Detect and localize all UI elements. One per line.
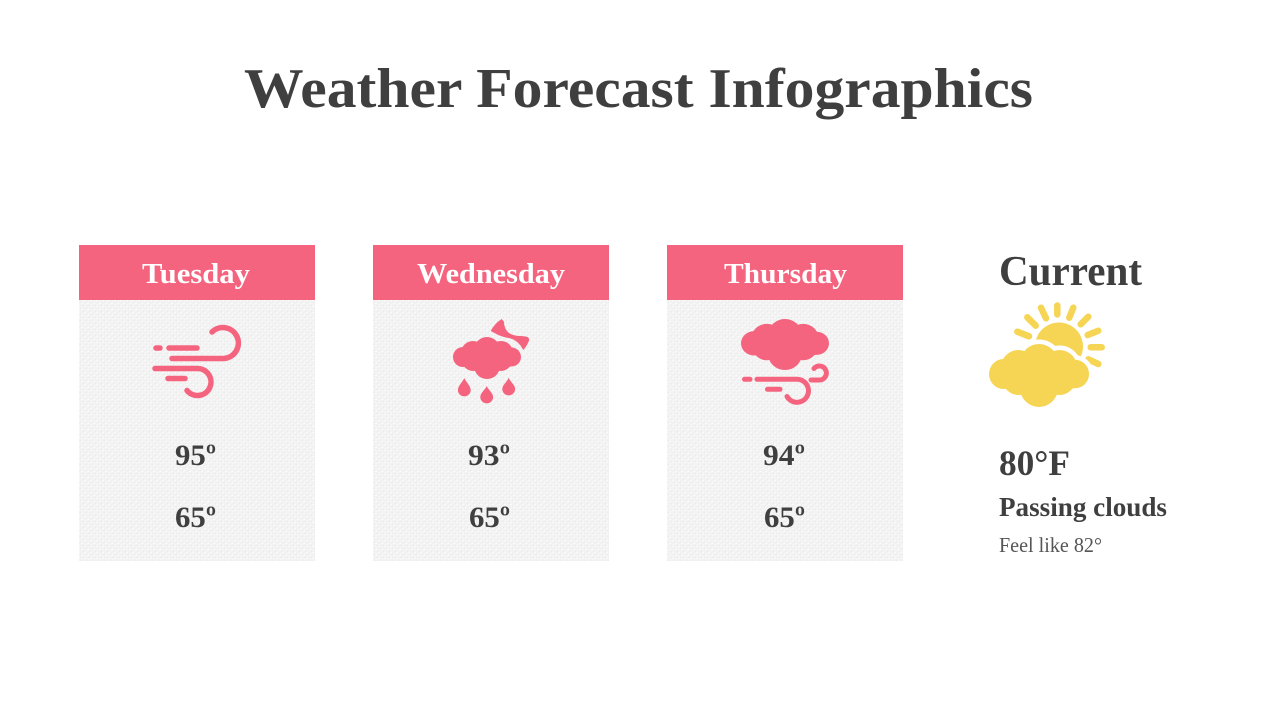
high temperature: Wednesday: 93º: [468, 439, 510, 472]
low temperature: Wednesday: 65º: [469, 501, 510, 534]
header bar: Thursday: [667, 245, 903, 300]
condition: Passing clouds: [999, 492, 1167, 522]
feels like: Feel like 82°: [999, 533, 1102, 557]
icon: sun behind cloud: [989, 306, 1102, 407]
icon: windy cloud: [741, 319, 829, 402]
panel: Wednesday: [373, 245, 609, 561]
heading: Thursday: Thursday: [724, 258, 848, 290]
heading: Wednesday: Wednesday: [417, 258, 566, 290]
current temperature: 80°F: [999, 443, 1070, 483]
panel body: Thursday: [667, 300, 903, 561]
high temperature: Tuesday: 95º: [175, 439, 216, 472]
header bar: Tuesday: [79, 245, 315, 300]
header bar: Wednesday: [373, 245, 609, 300]
icon: wind: [155, 328, 238, 395]
panel: Thursday: [667, 245, 903, 561]
heading: Tuesday: Tuesday: [142, 258, 251, 290]
panel: current conditions: [989, 249, 1167, 557]
high temperature: Thursday: 94º: [763, 439, 805, 472]
title: Weather Forecast Infographics: [244, 58, 1033, 120]
low temperature: Thursday: 65º: [764, 501, 805, 534]
low temperature: Tuesday: 65º: [175, 501, 216, 534]
icon: night rain cloud: [453, 319, 529, 403]
panel body: Wednesday: [373, 300, 609, 561]
panel body: Tuesday: [79, 300, 315, 561]
heading: Current: Current: [999, 249, 1142, 295]
panel: Tuesday: [79, 245, 315, 561]
